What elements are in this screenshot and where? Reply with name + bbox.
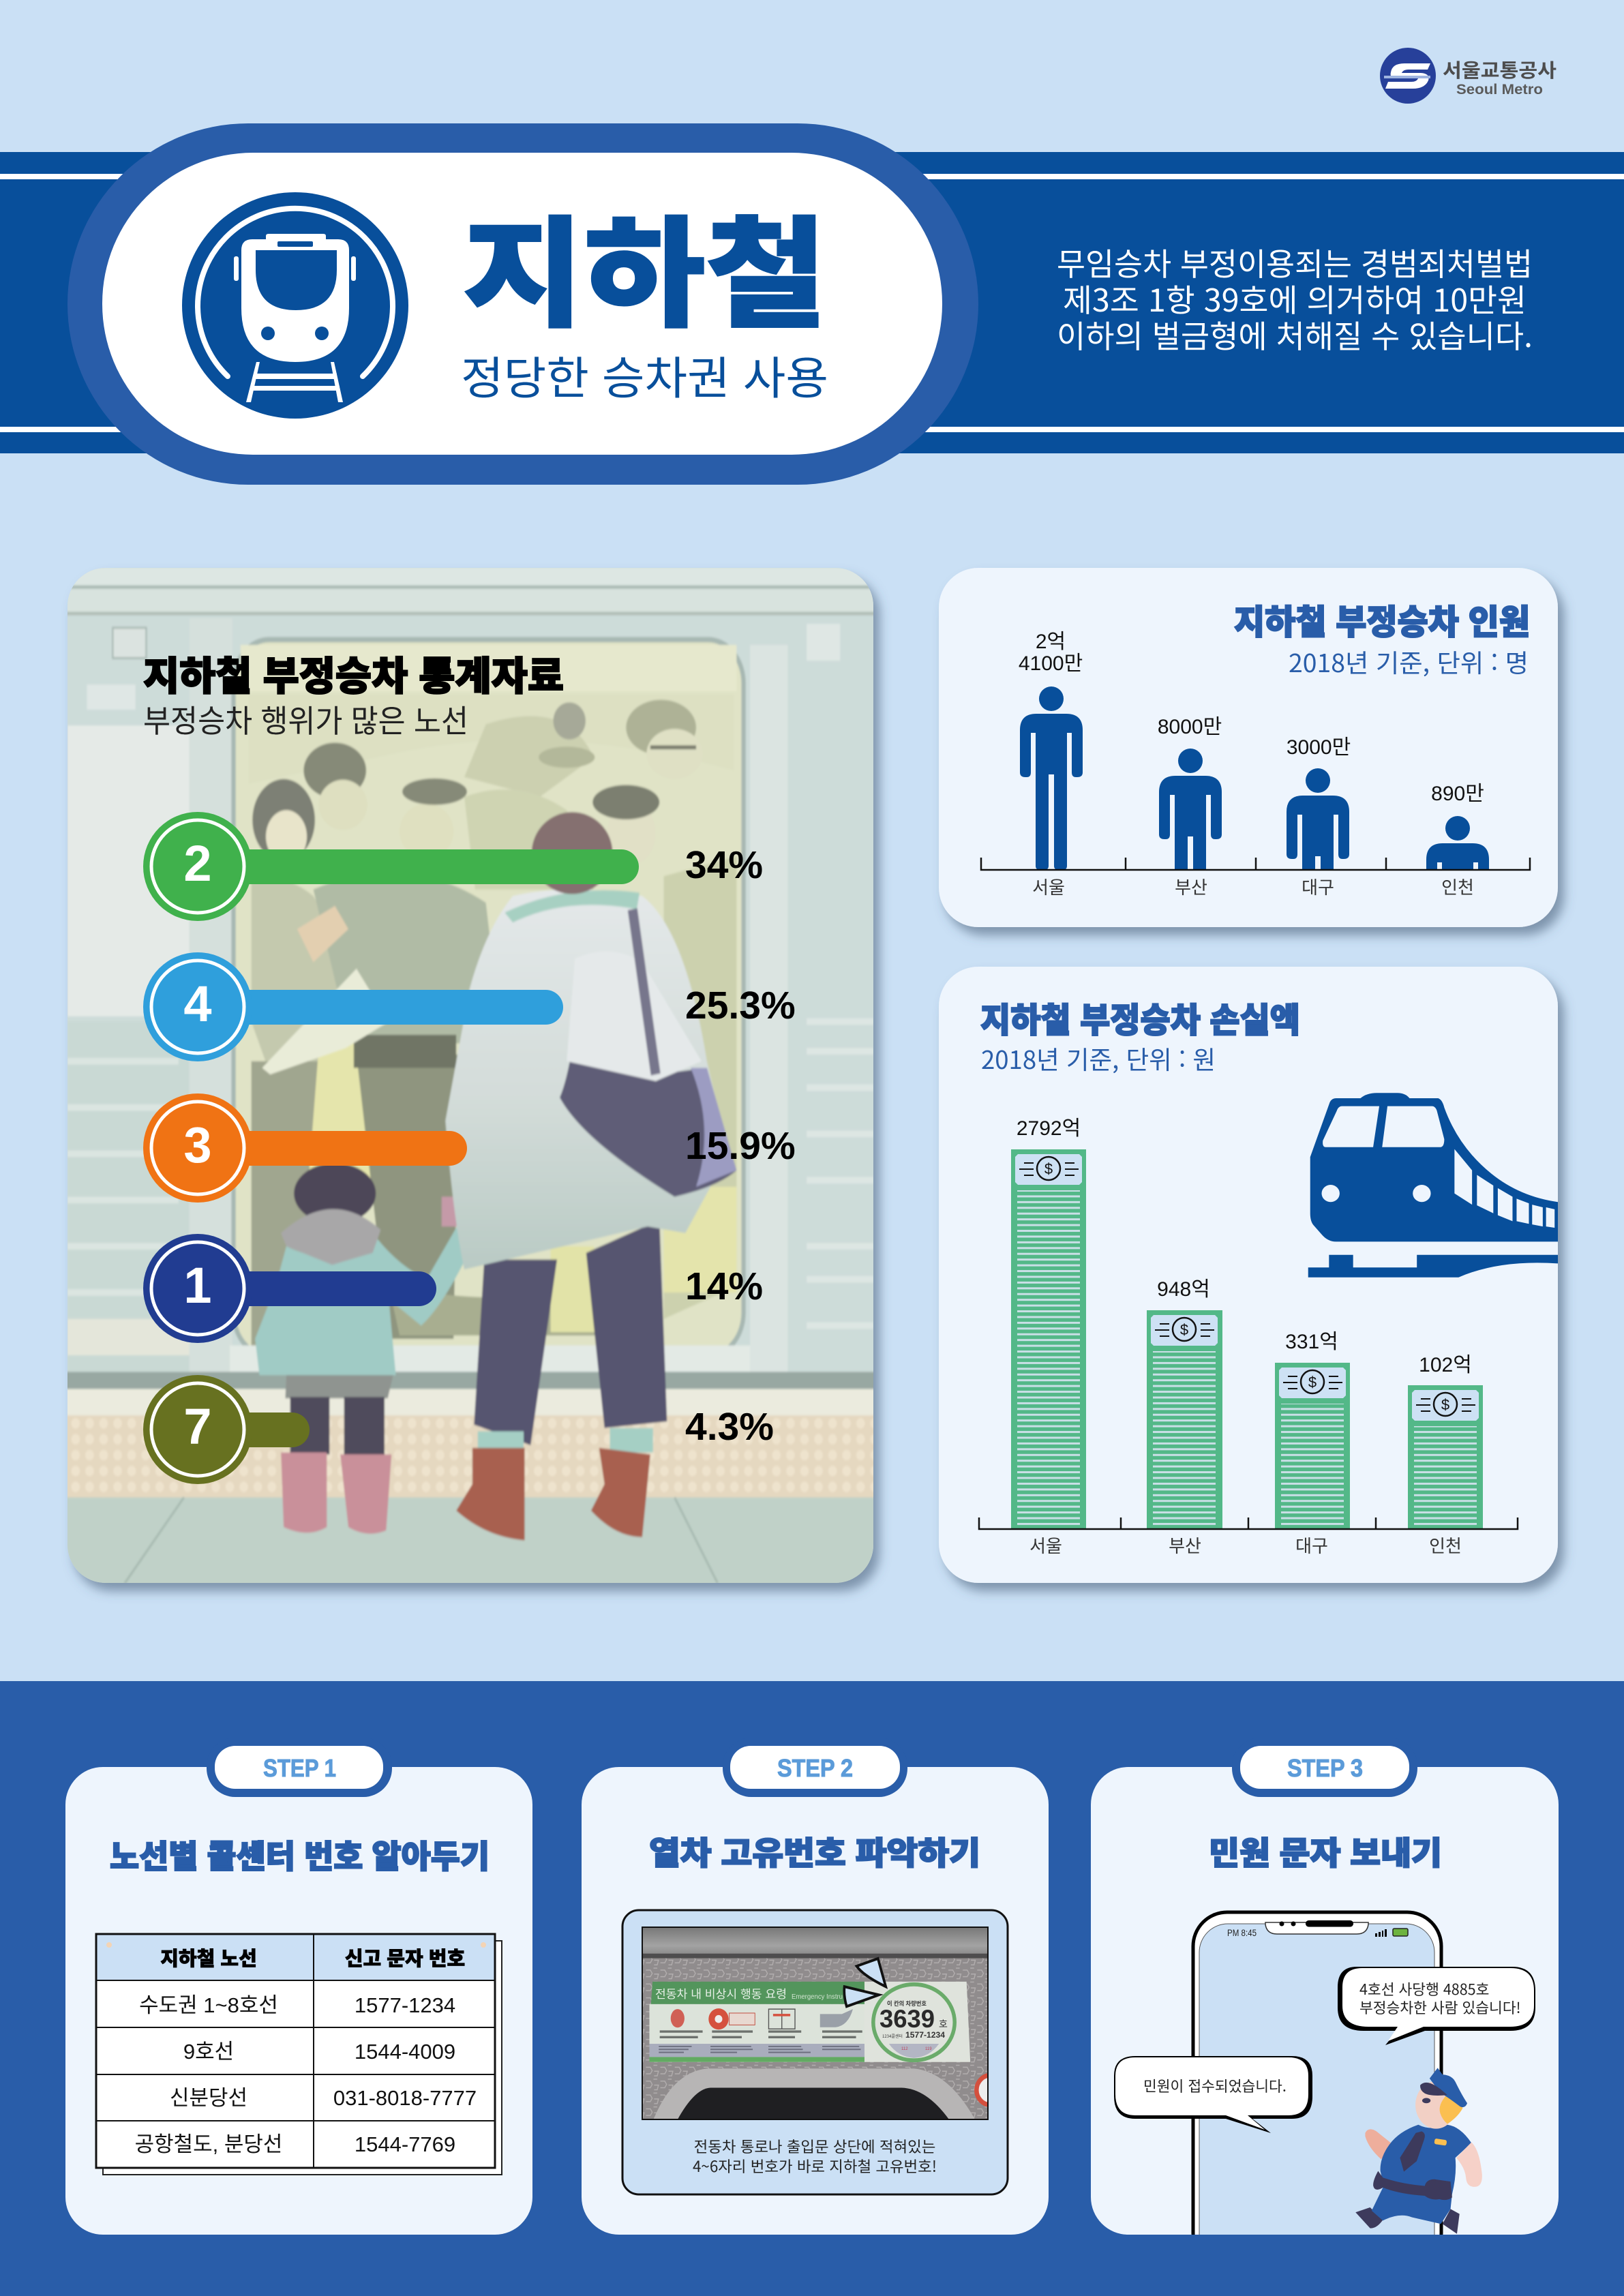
money bar chart: 부산 [1169,1532,1201,1558]
header law text: 이하의 벌금형에 처해질 수 있습니다. [1057,312,1533,357]
step heading: 열차 고유번호 파악하기 [649,1827,980,1874]
icon: train on bridge [1308,1093,1558,1278]
bar: Incheon 102 [1408,1385,1483,1529]
step heading: 노선별 콜센터 번호 알아두기 [110,1830,490,1877]
table: report numbers [96,1934,502,2175]
photo-like subway scene [55,559,900,1595]
step tab [1232,1738,1417,1797]
bar: Seoul 2792 [1011,1149,1086,1529]
bar: line 3: 15.9% [685,1124,796,1168]
money bar chart: 대구 [1295,1532,1328,1558]
pictogram chart: 부산 [1175,874,1207,899]
table: report numbers: 지하철 노선 [160,1943,257,1972]
bar: line 2: 34% [685,843,763,887]
step tab: STEP 2 [777,1754,853,1782]
panel: step 2 [582,1738,1049,2235]
photo: train interior sign: 112 [901,2047,908,2051]
panel: fare evasion statistics [55,559,900,1595]
icon: smartphone [1193,1912,1441,2267]
caption box [622,1910,1008,2194]
icon: train in circle [182,192,408,419]
icon: smartphone: PM 8:45 [1227,1927,1257,1938]
bar: line 7: 4.3% [685,1405,774,1449]
step heading: 민원 문자 보내기 [1209,1827,1442,1874]
table: report numbers: 031-8018-7777 [333,2086,477,2110]
step tab: STEP 3 [1287,1754,1363,1782]
money bar chart: 2792억 [1017,1117,1081,1140]
bar: line 4: 4 [183,976,212,1032]
bar: line 2: 2 [183,835,212,892]
step tab [207,1738,392,1797]
speech bubble: reply [1114,2056,1312,2133]
panel subheading: 2018년 기준, 단위 : 원 [981,1040,1216,1076]
bar: Seoul 2792: $ [1044,1160,1053,1177]
logo: Seoul Metro: 서울교통공사 [1443,56,1557,83]
photo: train interior sign: 호 [939,2017,948,2031]
illustration: police officer [1355,2068,1482,2234]
table: report numbers: 1577-1234 [355,1993,455,2017]
pictogram chart [980,631,1531,896]
pictogram chart: 대구 [1302,874,1334,899]
speech bubble: report message: 4호선 사당행 4885호 [1359,1978,1489,1999]
money bar chart: 948억 [1157,1278,1210,1301]
table: report numbers: 신분당선 [170,2086,247,2110]
bar: line 2 [143,812,763,921]
panel heading: 지하철 부정승차 손실액 [980,993,1300,1042]
title pill [67,123,978,485]
panel subheading: 2018년 기준, 단위 : 명 [1289,643,1529,680]
bar: Daegu 331: $ [1308,1374,1317,1391]
photo: train interior sign: 3639 [879,2005,935,2033]
table: report numbers: 공항철도, 분당선 [135,2132,282,2156]
bar: line 1: 1 [183,1257,212,1314]
table: report numbers: 9호선 [183,2040,234,2064]
pictogram chart: 890만 [1431,783,1484,805]
bar: line 3: 3 [183,1117,212,1173]
bar: line 4 [143,952,796,1061]
bar: line 7: 7 [183,1398,212,1455]
mother [474,1220,667,1445]
speech bubble: report message [1338,1967,1535,2045]
panel: step 3 [1091,1738,1559,2267]
logo: Seoul Metro: Seoul Metro [1456,82,1543,97]
bar: line 4: 25.3% [685,984,796,1027]
pictogram chart: 8000만 [1158,716,1222,738]
table: report numbers: 1544-7769 [355,2132,455,2156]
pictogram chart: 2억 [1036,631,1066,653]
section background: how to report [0,1681,1624,2296]
pictogram chart: 인천 [1441,874,1474,899]
bar: line 1 [143,1234,763,1343]
photo: train interior sign: 119 [925,2047,932,2051]
bar: Incheon 102: $ [1441,1396,1449,1413]
photo: train interior sign: 이 칸의 차량번호 [887,1999,927,2008]
caption [693,2135,937,2177]
pictogram chart: 서울 [1032,874,1065,899]
bar: Busan 948 [1147,1310,1222,1529]
photo: train interior sign: 1577-1234 [905,2030,945,2040]
header law text [1057,240,1533,357]
header law text: 제3조 1항 39호에 의거하여 10만원 [1063,276,1527,321]
pictogram chart: 4100만 [1019,652,1083,675]
caption: 4~6자리 번호가 바로 지하철 고유번호! [693,2155,937,2177]
bar: line 7 [143,1375,774,1484]
panel: loss amount by city [939,967,1558,1583]
money bar chart [979,1117,1518,1558]
panel heading: 지하철 부정승차 인원 [1234,595,1530,644]
table: report numbers: 수도권 1~8호선 [139,1993,278,2017]
child [255,1223,468,1375]
photo: train interior sign [642,1927,1005,2119]
subtitle: 정당한 승차권 사용 [461,342,828,408]
photo: train interior sign: 1234콜센터 [882,2033,903,2039]
speech bubble: report message: 부정승차한 사람 있습니다! [1359,1997,1521,2018]
panel: fare evaders by city [938,568,1571,942]
header band [0,152,1624,453]
panel heading: 지하철 부정승차 통계자료 [143,644,564,701]
bar: Daegu 331 [1275,1363,1350,1529]
money bar chart: 인천 [1429,1532,1462,1558]
caption: 전동차 통로나 출입문 상단에 적혀있는 [694,2135,935,2157]
photo: train interior sign: 전동차 내 비상시 행동 요령 [655,1984,787,2002]
bar: line 3 [143,1093,796,1203]
heading: 지하철 [462,177,827,351]
bar: Busan 948: $ [1180,1321,1188,1338]
logo: Seoul Metro [1380,48,1557,104]
header law text: 무임승차 부정이용죄는 경범죄처벌법 [1057,240,1533,285]
speech bubble: reply: 민원이 접수되었습니다. [1143,2075,1287,2096]
money bar chart: 102억 [1419,1354,1472,1376]
money bar chart: 331억 [1285,1331,1338,1353]
panel: step 1 [65,1738,532,2235]
step tab [723,1738,907,1797]
table: report numbers: 1544-4009 [355,2040,455,2064]
photo: train interior sign: Emergency Instru [792,1993,843,2001]
arrow marks [844,1959,886,2006]
panel subheading: 부정승차 행위가 많은 노선 [143,697,468,742]
step tab: STEP 1 [263,1754,336,1782]
bar: line 1: 14% [685,1265,763,1308]
money bar chart: 서울 [1029,1532,1062,1558]
pictogram chart: 3000만 [1287,736,1351,759]
table: report numbers: 신고 문자 번호 [345,1943,465,1972]
